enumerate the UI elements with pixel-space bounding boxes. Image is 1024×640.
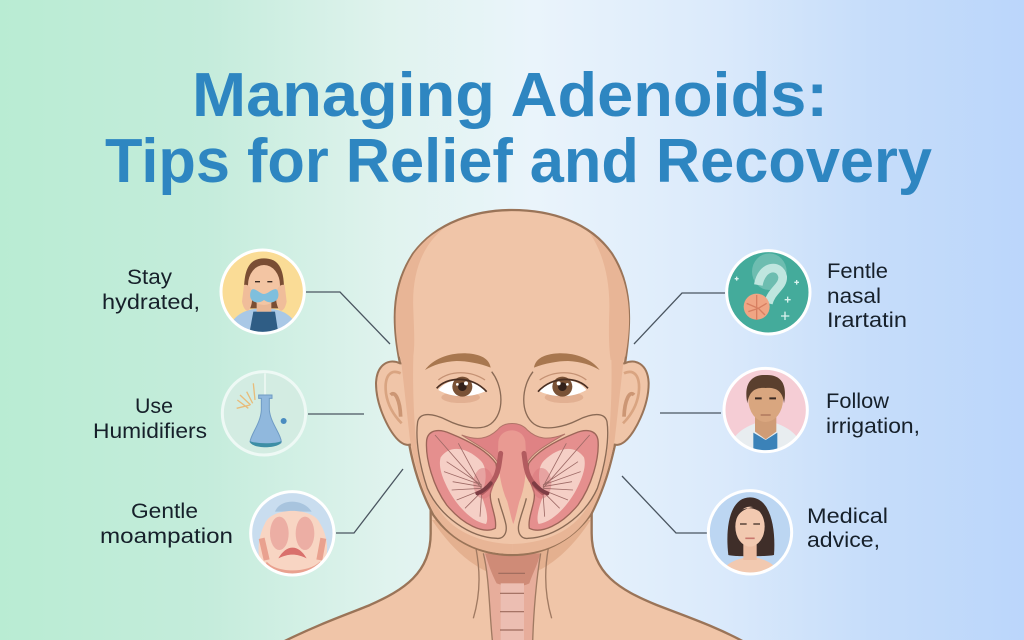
tip: gentle moampation: moampation: [100, 525, 233, 548]
tip: follow irrigation: [723, 367, 920, 453]
tip: stay hydrated: [102, 247, 310, 340]
tip: stay hydrated: Stay: [127, 266, 173, 289]
tip: follow irrigation: Follow: [826, 390, 890, 413]
right branch: [524, 453, 547, 493]
icon: nasal anatomy: [248, 490, 337, 578]
tip: gentle moampation: [100, 490, 337, 578]
nasal passage: [462, 423, 565, 524]
tip: use humidifiers: Humidifiers: [93, 420, 207, 443]
icon: woman with nasal mask: [220, 248, 306, 335]
tip: fentle nasal irartatin: Fentle: [827, 260, 888, 283]
tip: medical advice: advice,: [807, 529, 880, 552]
tip: fentle nasal irartatin: Irartatin: [827, 309, 907, 332]
icon: teal nasal spray: [725, 248, 812, 337]
connector lines: [306, 292, 725, 533]
left face details: [376, 353, 512, 554]
icon: male doctor: [723, 367, 810, 453]
tip: follow irrigation: irrigation,: [826, 415, 920, 438]
chin shadow: [432, 520, 591, 578]
head and face base: [395, 210, 629, 555]
tip: medical advice: Medical: [807, 505, 888, 528]
tip: fentle nasal irartatin: nasal: [827, 285, 881, 308]
tip: use humidifiers: [93, 370, 310, 460]
skull side shading: [396, 227, 629, 360]
icon: woman portrait: [708, 490, 792, 575]
title: [105, 61, 933, 196]
trachea: [473, 548, 552, 640]
neck and shoulders: [280, 500, 747, 640]
title: Tips for Relief and Recovery: [105, 127, 933, 196]
icon: flask humidifier: [220, 370, 310, 460]
left branch: [477, 453, 501, 493]
tip: medical advice: [708, 490, 888, 575]
tip: stay hydrated: hydrated,: [102, 291, 200, 314]
tip: fentle nasal irartatin: [725, 248, 907, 337]
title: Managing Adenoids:: [192, 61, 828, 130]
tip: gentle moampation: Gentle: [131, 500, 198, 523]
tip: use humidifiers: Use: [135, 395, 173, 418]
right face details: [512, 353, 649, 554]
head illustration: [280, 210, 747, 640]
